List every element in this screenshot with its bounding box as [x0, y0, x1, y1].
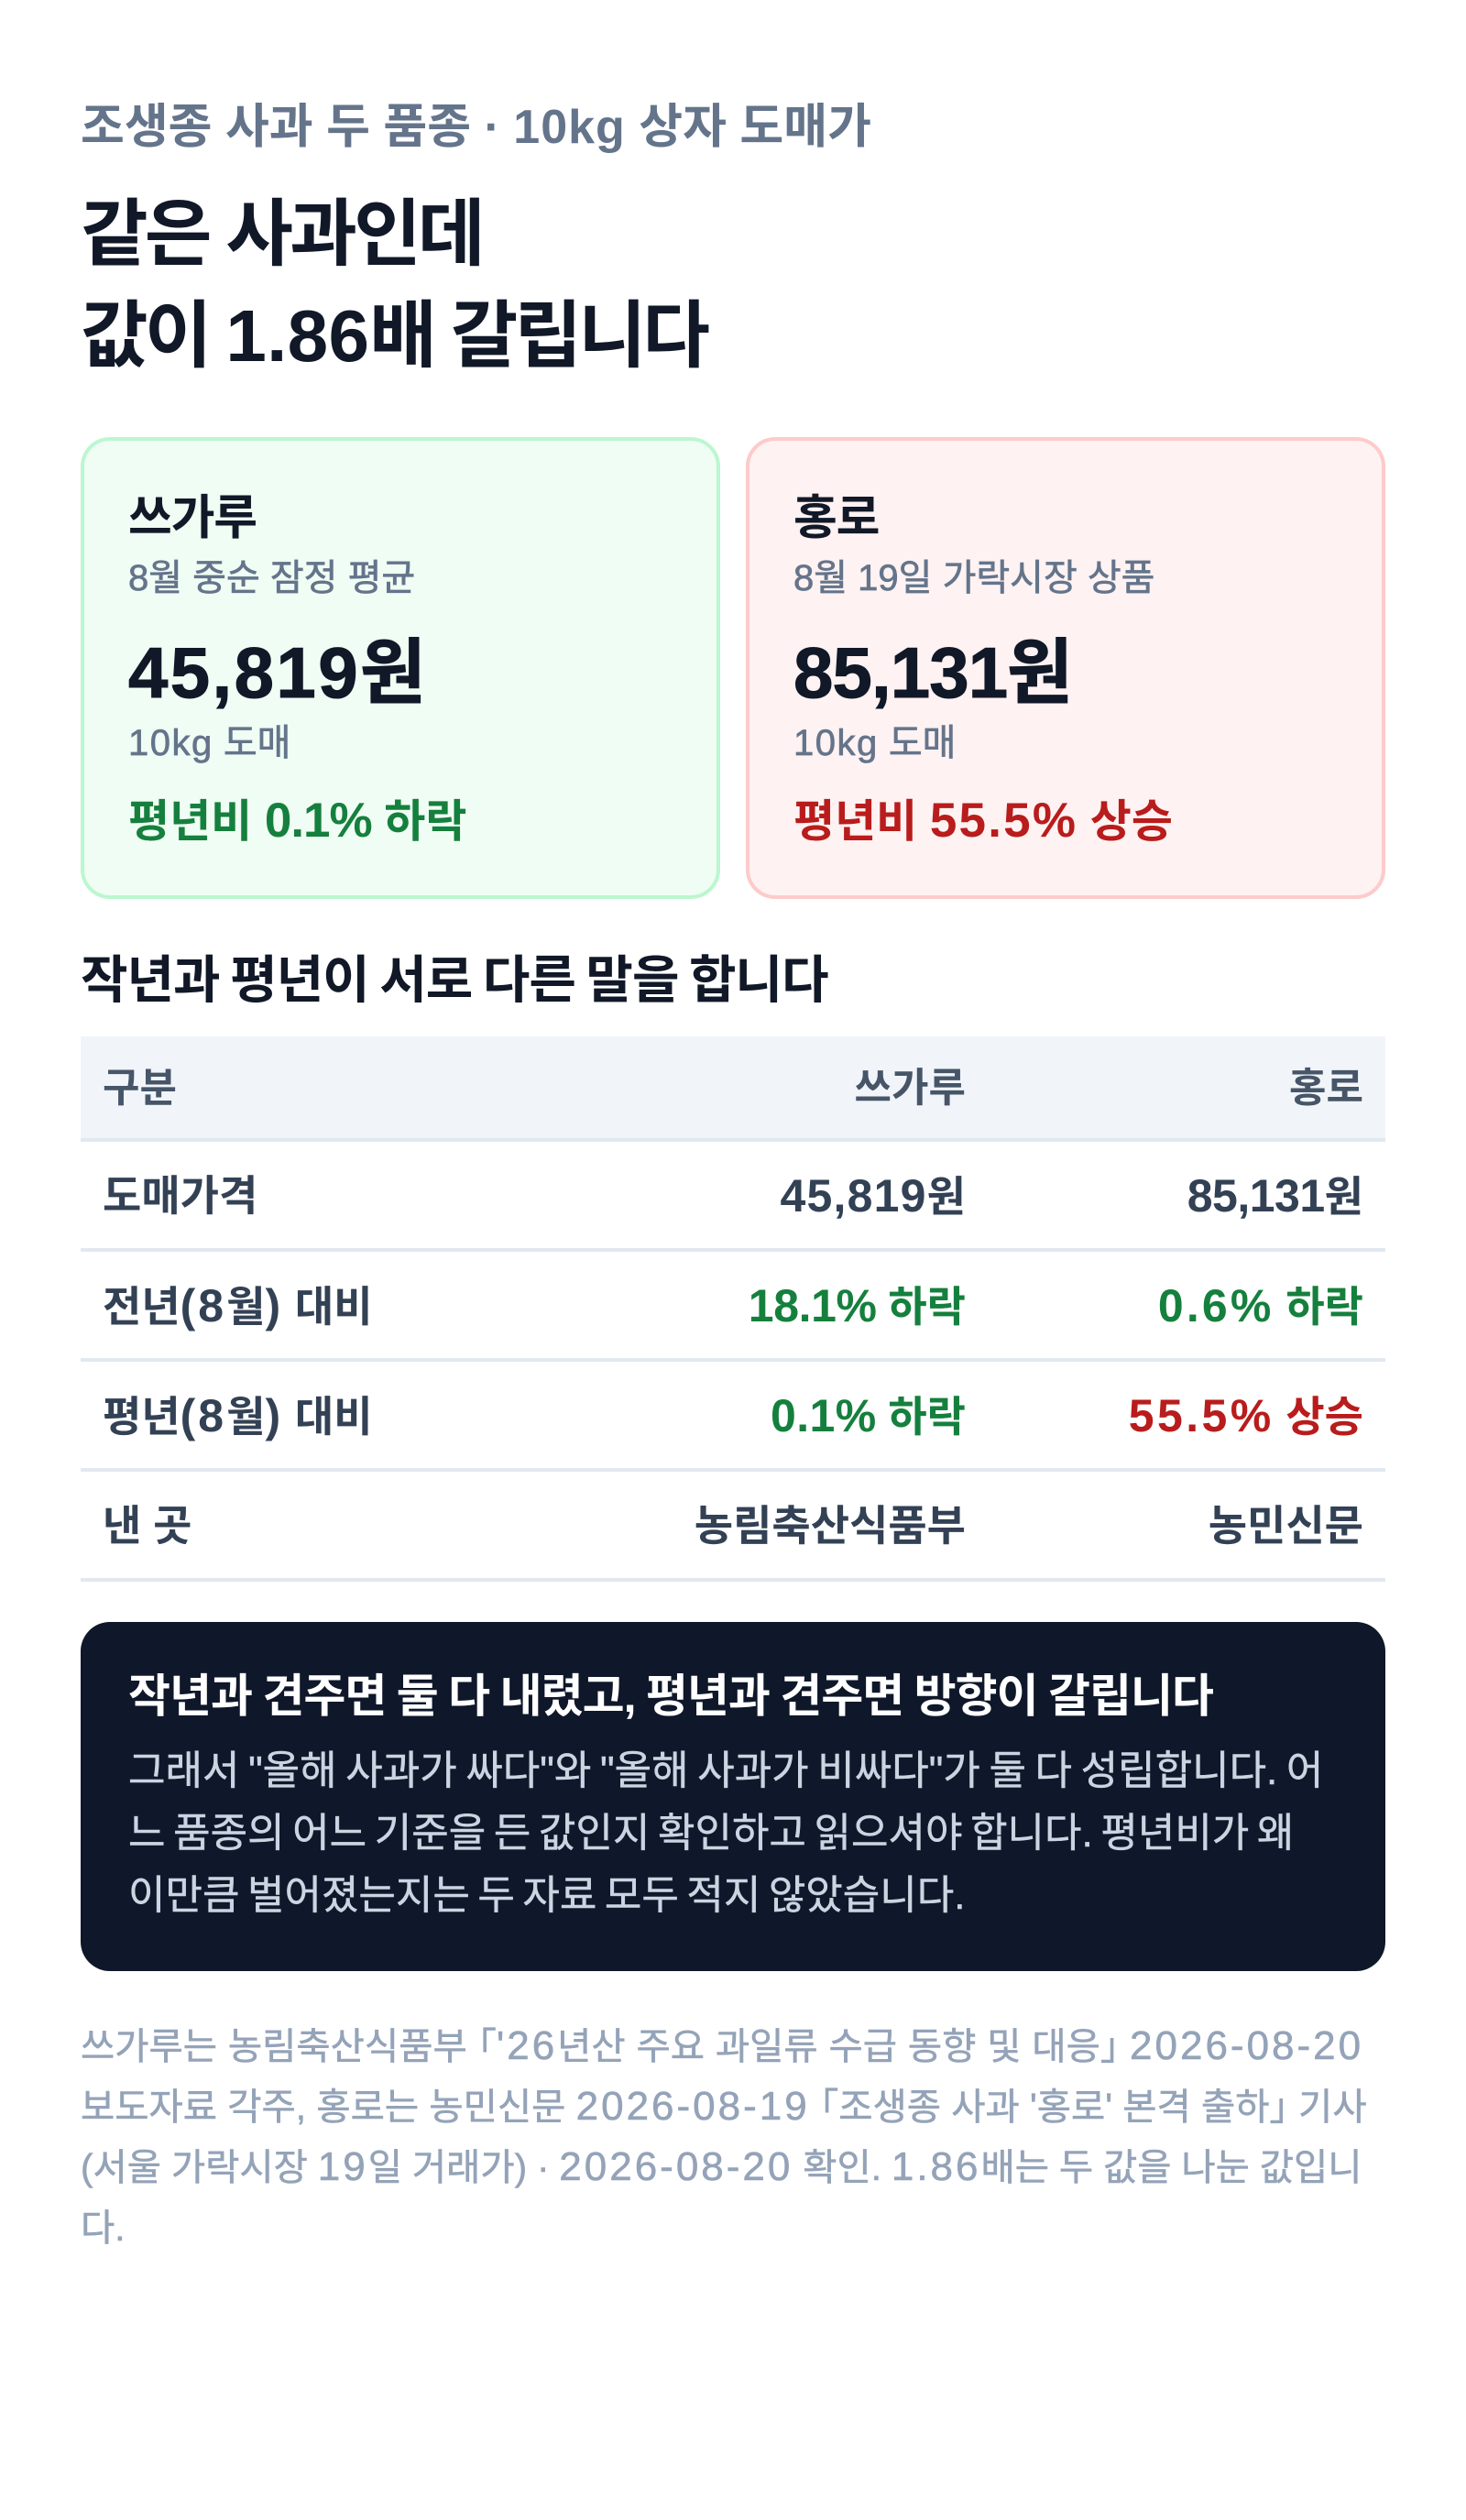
- source note: 보도자료 각주, 홍로는 농민신문 2026-08-19 「조생종 사과 '홍로' 본격 출하」 기사: [81, 2084, 1367, 2129]
- value: 18.1% 하락: [749, 1280, 966, 1331]
- callout body: 느 품종의 어느 기준을 든 값인지 확인하고 읽으셔야 합니다. 평년비가 왜: [128, 1811, 1294, 1856]
- card subtitle: 8월 19일 가락시장 상품: [793, 558, 1154, 598]
- delta: 평년비 55.5% 상승: [793, 794, 1173, 848]
- callout body: 그래서 "올해 사과가 싸다"와 "올해 사과가 비싸다"가 둘 다 성립합니다. 어: [128, 1748, 1323, 1793]
- value: 85,131원: [1187, 1170, 1363, 1222]
- table header row: [81, 1036, 1385, 1142]
- card name: 홍로: [793, 492, 879, 545]
- title: [81, 193, 709, 377]
- callout heading: 작년과 견주면 둘 다 내렸고, 평년과 견주면 방향이 갈립니다: [128, 1671, 1213, 1722]
- panel: 홍로 card: [746, 437, 1385, 899]
- price: 85,131원: [793, 632, 1072, 713]
- price: 45,819원: [128, 632, 428, 713]
- source note: 쓰가루는 농림축산식품부 「'26년산 주요 과일류 수급 동향 및 대응」 2026-08-20: [81, 2023, 1363, 2068]
- header: 쓰가루: 쓰가루: [855, 1066, 966, 1111]
- unit: 10kg 도매: [128, 723, 290, 763]
- row: 도매가격: 도매가격: [103, 1172, 257, 1220]
- title: 값이 1.86배 갈립니다: [81, 295, 706, 377]
- callout body: [128, 1748, 1323, 1918]
- value: 45,819원: [781, 1170, 966, 1222]
- delta: 평년비 0.1% 하락: [128, 794, 466, 848]
- unit: 10kg 도매: [793, 723, 956, 763]
- row: 낸 곳: 낸 곳: [103, 1502, 191, 1550]
- value: 농민신문: [1209, 1502, 1363, 1550]
- row: 평년 대비: 평년(8월) 대비: [103, 1390, 373, 1441]
- kicker: 조생종 사과 두 품종 · 10kg 상자 도매가: [81, 101, 871, 154]
- value: 농림축산식품부: [695, 1502, 966, 1550]
- comparison table: [81, 1036, 1385, 1582]
- callout panel: [81, 1622, 1385, 1971]
- card name: 쓰가루: [128, 492, 257, 545]
- value: 0.6% 하락: [1158, 1280, 1363, 1331]
- source note: [81, 2023, 1367, 2249]
- callout body: 이만큼 벌어졌는지는 두 자료 모두 적지 않았습니다.: [128, 1873, 965, 1918]
- panel: 쓰가루 card: [81, 437, 720, 899]
- value: 0.1% 하락: [771, 1390, 966, 1441]
- source note: 다.: [81, 2207, 126, 2249]
- card subtitle: 8월 중순 잠정 평균: [128, 558, 415, 598]
- row: 전년 대비: 전년(8월) 대비: [103, 1280, 373, 1331]
- header: 구분: 구분: [103, 1066, 177, 1111]
- section heading: 작년과 평년이 서로 다른 말을 합니다: [81, 951, 828, 1009]
- header: 홍로: 홍로: [1289, 1066, 1363, 1111]
- value: 55.5% 상승: [1129, 1390, 1363, 1441]
- source note: (서울 가락시장 19일 거래가) · 2026-08-20 확인. 1.86배는 두 값을 나눈 값입니: [81, 2144, 1362, 2189]
- title: 같은 사과인데: [81, 193, 482, 275]
